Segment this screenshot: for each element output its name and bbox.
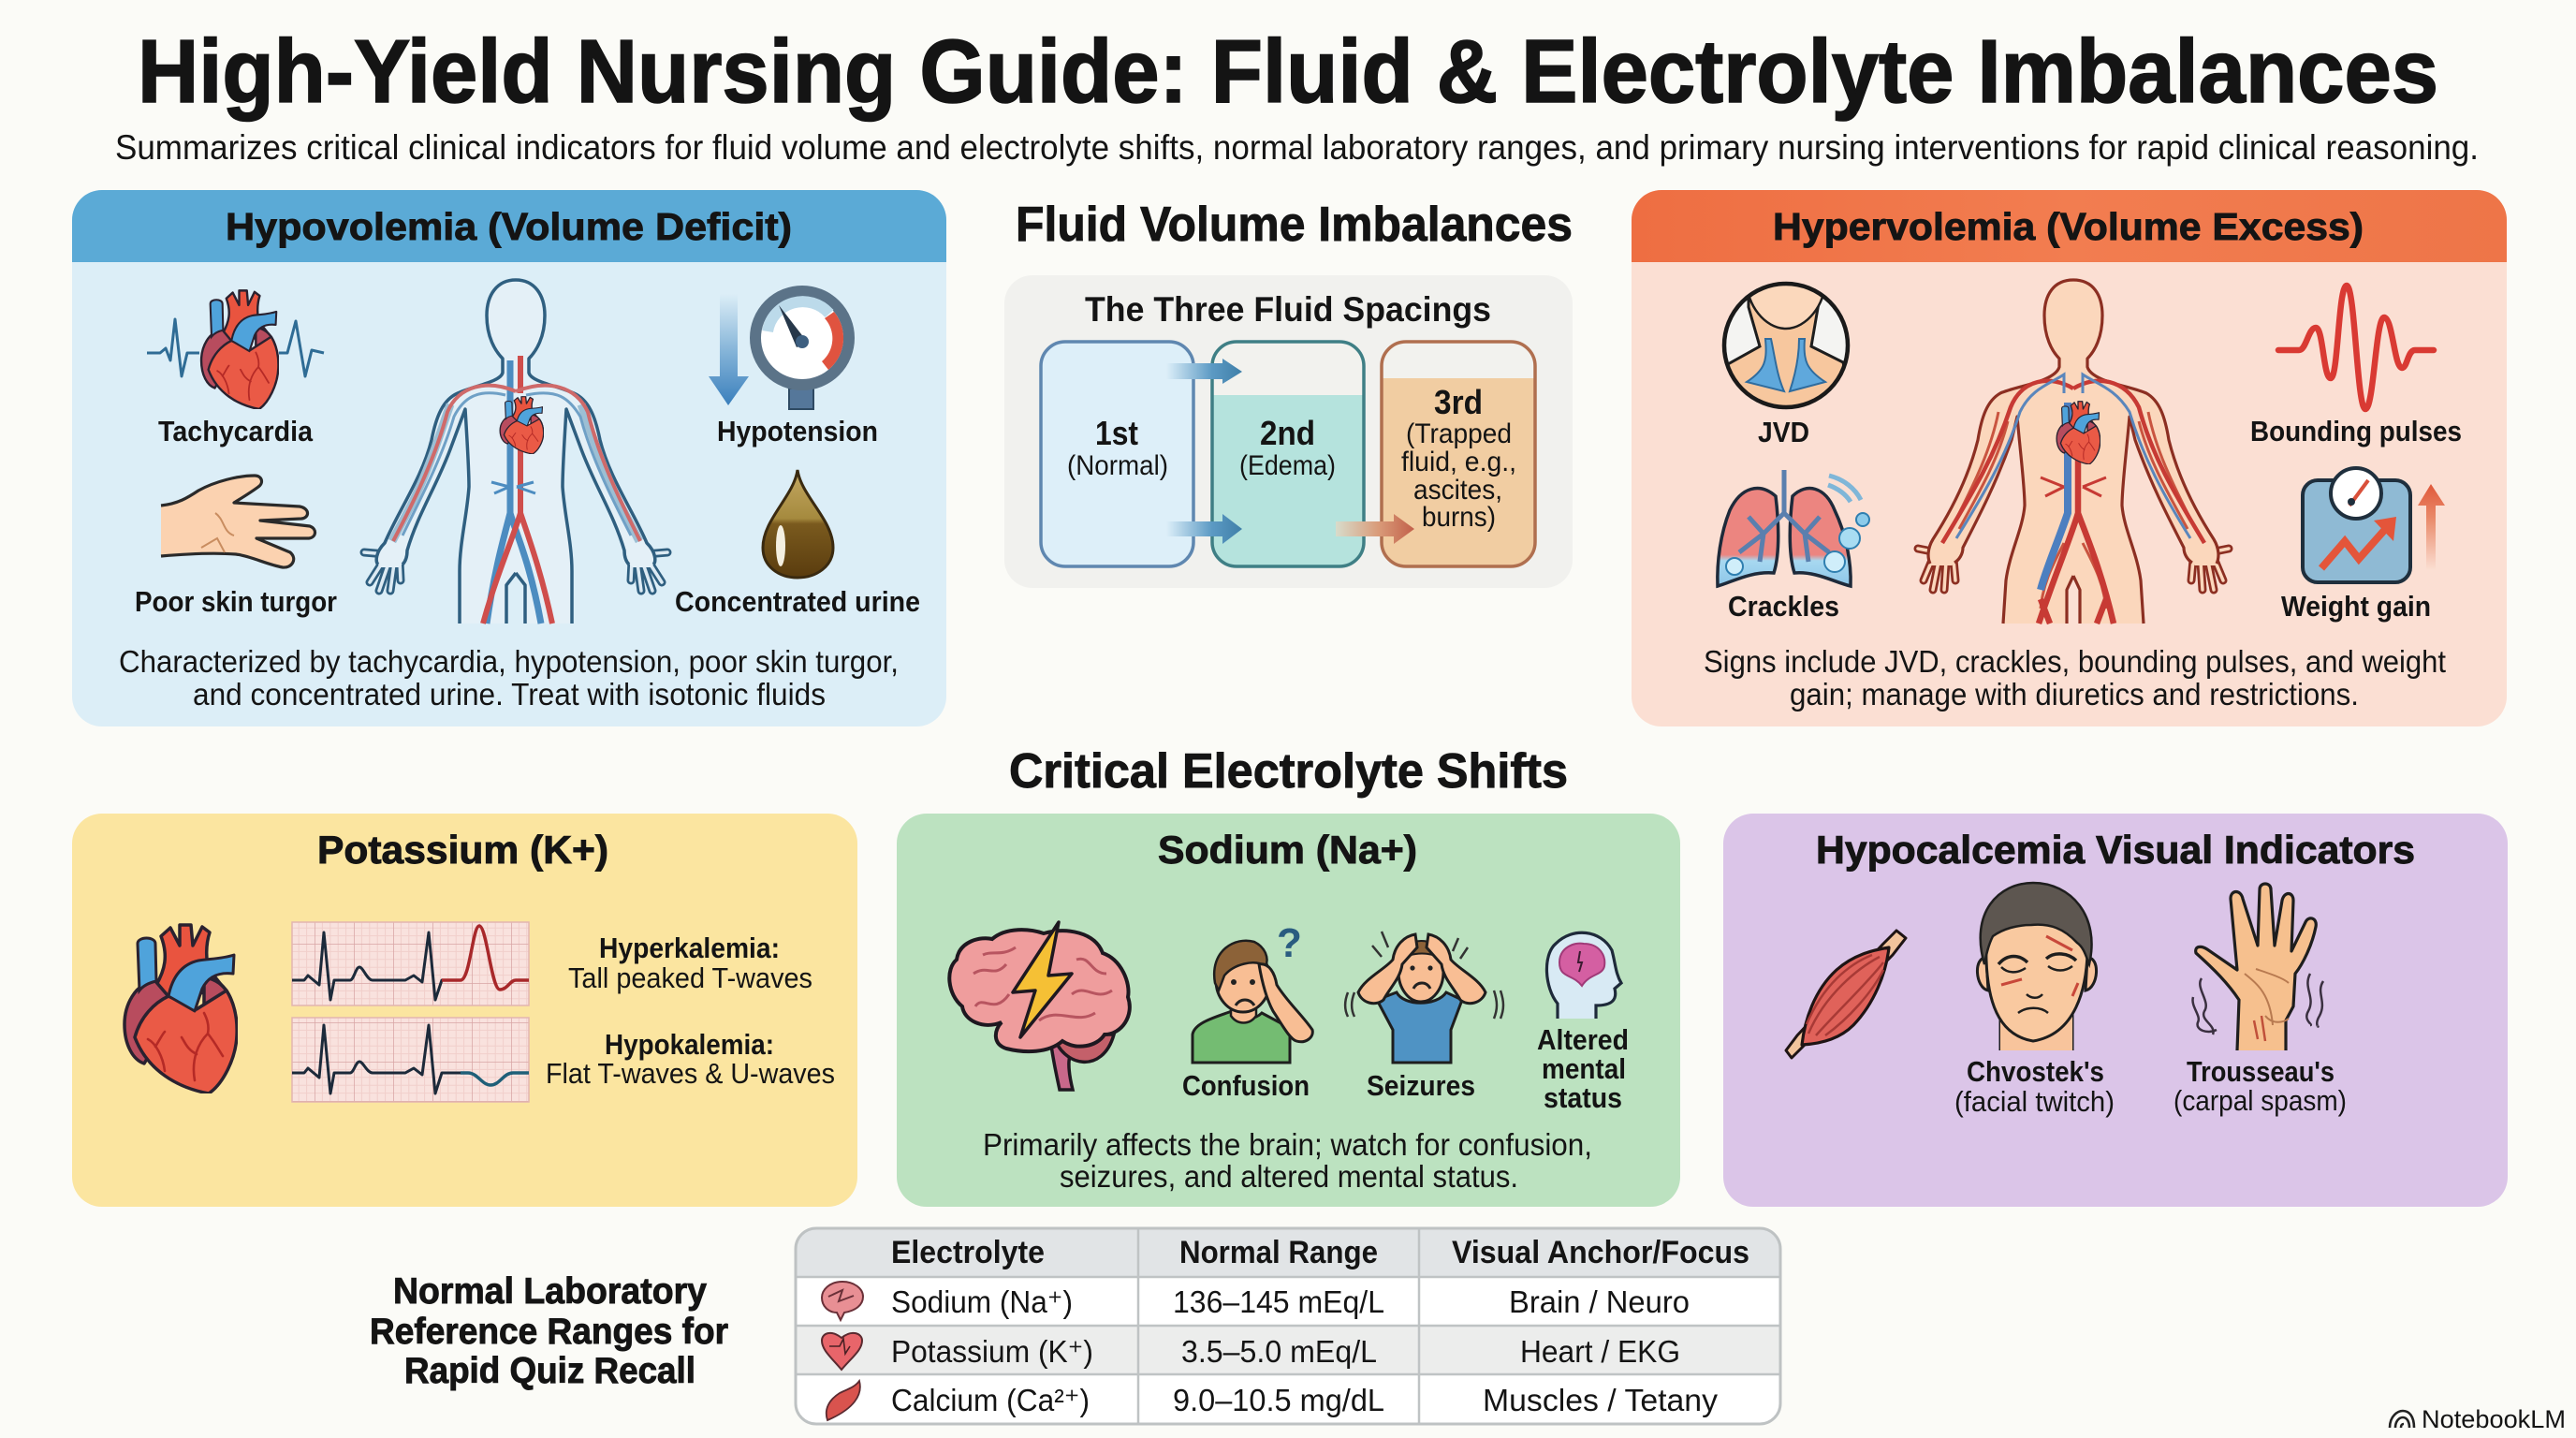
icon: confused person bbox=[1193, 920, 1312, 1063]
compartment: third spacing: ascites, bbox=[1413, 475, 1502, 506]
icon: tachycardia heart with ECG bbox=[147, 290, 324, 409]
heading: three fluid spacings: The Three Fluid Spacings bbox=[1085, 290, 1491, 329]
label: altered mental status: Altered bbox=[1537, 1023, 1629, 1056]
description: hypovolemia bbox=[119, 644, 899, 712]
table row: calcium: Calcium (Ca²⁺) bbox=[891, 1383, 1090, 1417]
heading: normal laboratory reference ranges bbox=[370, 1271, 728, 1391]
compartment: third spacing: burns) bbox=[1422, 502, 1496, 533]
heading: normal laboratory reference ranges: Normal Laboratory bbox=[393, 1271, 707, 1312]
label: hyperkalemia: Hyperkalemia: bbox=[599, 932, 780, 964]
table row: potassium: 3.5–5.0 mEq/L bbox=[1181, 1334, 1377, 1369]
table row: sodium: 136–145 mEq/L bbox=[1173, 1284, 1384, 1319]
header: hypovolemia bbox=[72, 190, 946, 262]
heading: fluid volume imbalances: Fluid Volume Imbalances bbox=[1016, 198, 1573, 252]
compartment: first spacing bbox=[1041, 342, 1193, 566]
label: Chvostek's: Chvostek's bbox=[1967, 1055, 2104, 1088]
header: hypervolemia bbox=[1632, 190, 2507, 262]
watermark: NotebookLM: NotebookLM bbox=[2422, 1405, 2566, 1433]
compartment: second spacing: (Edema) bbox=[1239, 450, 1336, 481]
panel: hypovolemia bbox=[72, 190, 946, 726]
label: tachycardia: Tachycardia bbox=[158, 415, 314, 448]
table header: Electrolyte bbox=[891, 1235, 1045, 1270]
label: hyperkalemia bbox=[568, 932, 812, 994]
panel: sodium bbox=[897, 814, 1680, 1207]
compartment: second spacing: 2nd bbox=[1260, 414, 1315, 452]
icon: bounding pulse waveform bbox=[2278, 286, 2434, 409]
description: hypovolemia: and concentrated urine. Treat with isotonic fluids bbox=[193, 677, 826, 712]
label: altered mental status: status bbox=[1544, 1081, 1622, 1114]
description: hypervolemia bbox=[1704, 644, 2446, 712]
description: hypovolemia: Characterized by tachycardia, hypotension, poor skin turgor, bbox=[119, 644, 899, 679]
icon: crackles lungs bbox=[1718, 470, 1869, 586]
subtitle: Summarizes critical clinical indicators for fluid volume and electrolyte shifts, normal laboratory ranges, and primary nursing interventions for rapid clinical reasoning. bbox=[115, 128, 2479, 167]
heading: sodium: Sodium (Na+) bbox=[1158, 828, 1417, 872]
icon: muscle bbox=[1786, 931, 1906, 1058]
table: normal ranges bbox=[796, 1228, 1780, 1424]
compartment: third spacing bbox=[1382, 342, 1535, 570]
label: Chvostek's bbox=[1954, 1055, 2115, 1118]
compartment: second spacing bbox=[1212, 342, 1364, 573]
table row: potassium: Heart / EKG bbox=[1520, 1334, 1680, 1369]
heading: potassium: Potassium (K+) bbox=[317, 828, 608, 872]
icon: Trousseau's carpal spasm hand bbox=[2193, 884, 2323, 1050]
icon: Chvostek's facial twitch face bbox=[1977, 883, 2097, 1050]
icon: brain with lightning bbox=[949, 922, 1130, 1090]
table header bbox=[891, 1235, 1749, 1270]
chart: hyperkalemia ECG bbox=[292, 922, 529, 1005]
table row: potassium: Potassium (K⁺) bbox=[891, 1334, 1093, 1369]
label: hypokalemia: Flat T-waves & U-waves bbox=[546, 1057, 835, 1090]
panel: hypocalcemia bbox=[1723, 814, 2508, 1207]
icon: body with vessels (deficit) bbox=[364, 280, 667, 624]
label: weight gain: Weight gain bbox=[2281, 590, 2431, 623]
icon: confused person: ? bbox=[1277, 920, 1302, 966]
icon: jugular vein distension bbox=[1719, 281, 1853, 412]
icon: weight increase arrow bbox=[2418, 484, 2445, 570]
header: hypovolemia: Hypovolemia (Volume Deficit) bbox=[226, 205, 792, 248]
icon: blood pressure gauge bbox=[755, 291, 849, 409]
table row: calcium bbox=[827, 1381, 1719, 1420]
arrow: second to third bbox=[1336, 514, 1414, 544]
label: seizures: Seizures bbox=[1367, 1069, 1475, 1102]
chart: hypokalemia ECG bbox=[292, 1018, 529, 1102]
table row: potassium bbox=[822, 1333, 1680, 1370]
heading: normal laboratory reference ranges: Rapid Quiz Recall bbox=[404, 1351, 695, 1391]
description: sodium bbox=[983, 1127, 1592, 1194]
title: High-Yield Nursing Guide: Fluid & Electrolyte Imbalances bbox=[138, 22, 2438, 122]
label: JVD: JVD bbox=[1758, 416, 1809, 448]
compartment: first spacing: 1st bbox=[1095, 414, 1138, 452]
icon: weight scale bbox=[2303, 468, 2410, 582]
label: Trousseau's bbox=[2174, 1055, 2347, 1117]
table row: calcium: Muscles / Tetany bbox=[1483, 1383, 1719, 1417]
compartment: third spacing: fluid, e.g., bbox=[1401, 447, 1516, 477]
label: Trousseau's: Trousseau's bbox=[2187, 1055, 2334, 1088]
table row: sodium bbox=[822, 1282, 1690, 1320]
icon: altered mental status head bbox=[1546, 932, 1621, 1019]
icon: heart bbox=[124, 925, 237, 1093]
compartment: first spacing: (Normal) bbox=[1067, 450, 1168, 481]
label: hypotension: Hypotension bbox=[717, 415, 878, 448]
icon: blood pressure down arrow bbox=[709, 294, 749, 405]
icon: seizure person bbox=[1345, 932, 1503, 1063]
table header: Visual Anchor/Focus bbox=[1452, 1235, 1749, 1270]
panel: three fluid spacings bbox=[1004, 275, 1573, 588]
panel: hypervolemia bbox=[1632, 190, 2507, 726]
icon: skin turgor hand bbox=[161, 476, 315, 567]
label: Chvostek's: (facial twitch) bbox=[1954, 1085, 2115, 1118]
label: bounding pulses: Bounding pulses bbox=[2250, 415, 2462, 448]
label: confusion: Confusion bbox=[1182, 1069, 1310, 1102]
panel: potassium bbox=[72, 814, 857, 1207]
description: sodium: seizures, and altered mental status. bbox=[1060, 1159, 1518, 1194]
table header: Normal Range bbox=[1179, 1235, 1378, 1270]
arrow: first to second upper bbox=[1166, 359, 1242, 384]
label: hypokalemia bbox=[546, 1028, 835, 1090]
table row: sodium: Brain / Neuro bbox=[1509, 1284, 1690, 1319]
compartment: third spacing: (Trapped bbox=[1406, 418, 1512, 449]
heading: critical electrolyte shifts: Critical Electrolyte Shifts bbox=[1009, 744, 1568, 799]
description: hypervolemia: Signs include JVD, crackles, bounding pulses, and weight bbox=[1704, 644, 2446, 679]
label: crackles: Crackles bbox=[1728, 590, 1839, 623]
table row: calcium: 9.0–10.5 mg/dL bbox=[1173, 1383, 1384, 1417]
description: sodium: Primarily affects the brain; watch for confusion, bbox=[983, 1127, 1592, 1162]
label: hyperkalemia: Tall peaked T-waves bbox=[568, 961, 812, 994]
label: poor skin turgor: Poor skin turgor bbox=[135, 585, 337, 618]
compartment: third spacing: 3rd bbox=[1434, 383, 1483, 421]
label: altered mental status: mental bbox=[1542, 1052, 1626, 1085]
heading: normal laboratory reference ranges: Reference Ranges for bbox=[370, 1312, 728, 1352]
arrow: first to second lower bbox=[1166, 514, 1242, 544]
label: altered mental status bbox=[1537, 1023, 1629, 1114]
header: hypervolemia: Hypervolemia (Volume Excess) bbox=[1773, 205, 2364, 248]
label: hypokalemia: Hypokalemia: bbox=[605, 1028, 774, 1061]
table row: sodium: Sodium (Na⁺) bbox=[891, 1284, 1073, 1319]
label: Trousseau's: (carpal spasm) bbox=[2174, 1084, 2347, 1117]
icon: body with vessels (excess) bbox=[1918, 280, 2229, 624]
label: concentrated urine: Concentrated urine bbox=[675, 585, 920, 618]
description: hypervolemia: gain; manage with diuretics and restrictions. bbox=[1790, 677, 2359, 712]
heading: hypocalcemia: Hypocalcemia Visual Indicators bbox=[1816, 828, 2415, 872]
icon: concentrated urine drop bbox=[763, 470, 833, 578]
